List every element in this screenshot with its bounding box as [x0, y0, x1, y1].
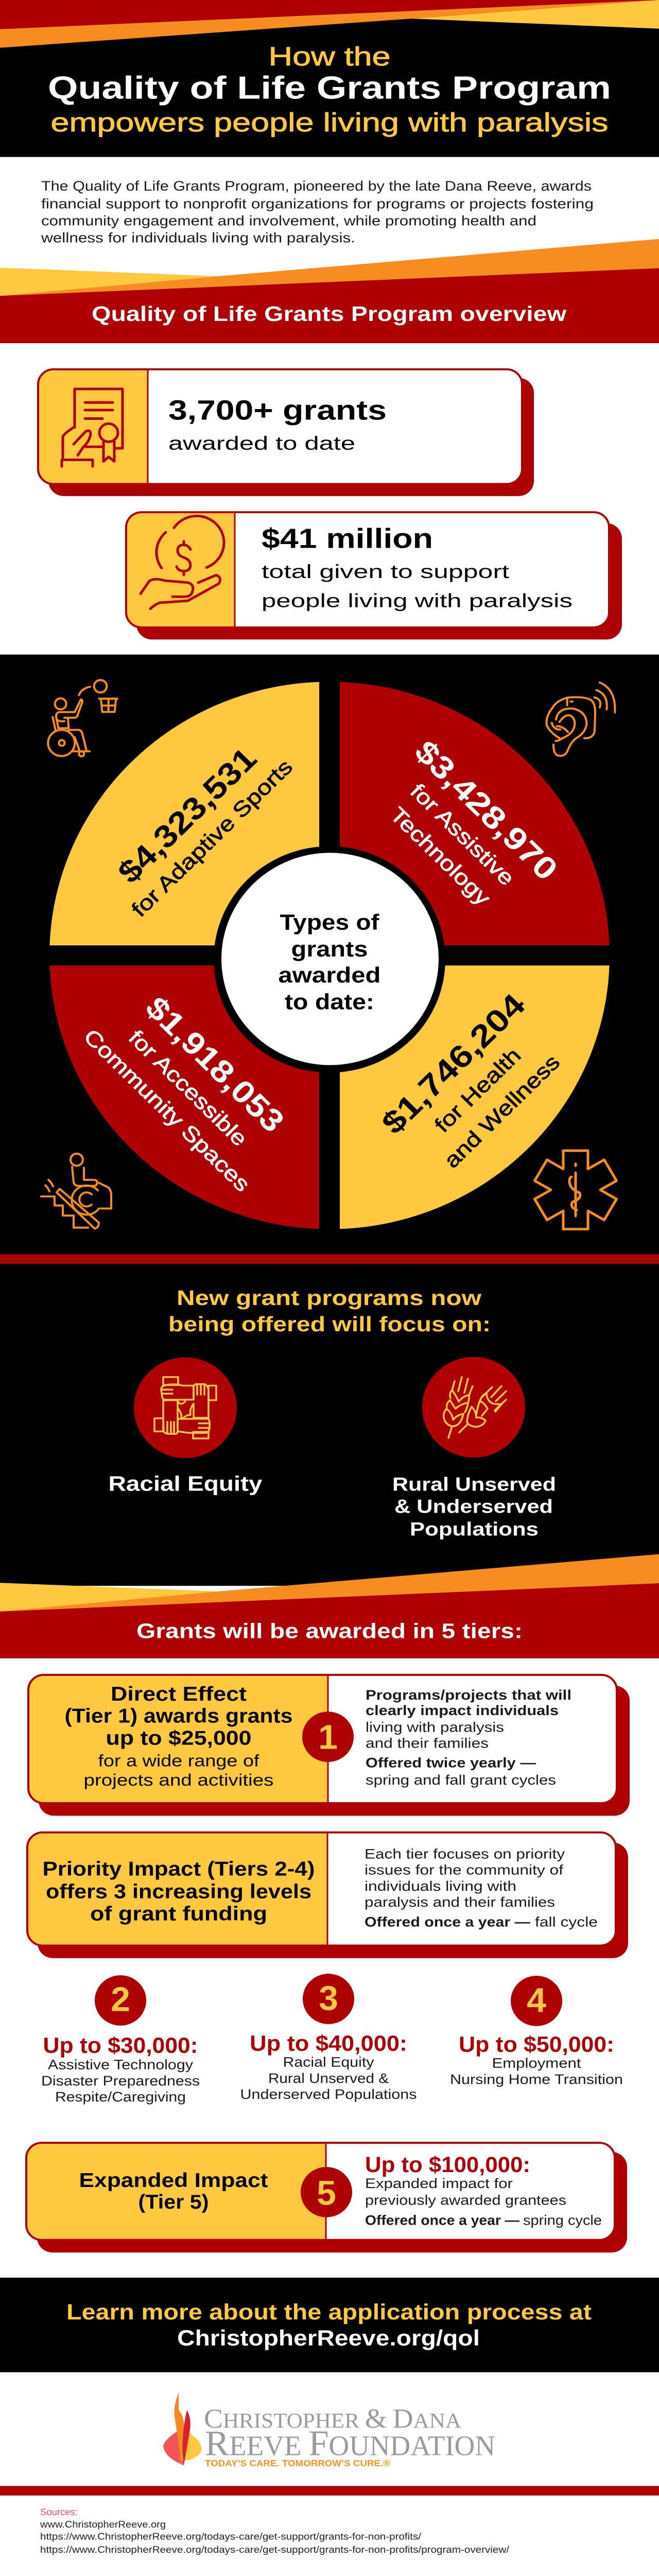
panel: grants stat card [38, 369, 534, 496]
icon: wheelchair basketball [48, 680, 117, 756]
sources [40, 2506, 510, 2555]
label: community spaces amount [79, 990, 291, 1196]
segment: adaptive sports [49, 682, 319, 945]
sources: Sources: [40, 2506, 78, 2517]
panel: header [0, 0, 659, 157]
label: health and wellness amount: and Wellness [439, 1050, 564, 1173]
intro text: community engagement and involvement, while promoting health and [41, 213, 536, 228]
text: priority impact summary: of grant funding [90, 1903, 267, 1925]
text: tier 5 summary: (Tier 5) [138, 2191, 209, 2213]
label: health and wellness amount [375, 987, 564, 1173]
sources: www.ChristopherReeve.org [40, 2519, 166, 2530]
text: tier 1 details: Offered twice yearly — [366, 1755, 536, 1771]
column: tier 3 [240, 1974, 417, 2102]
icon: certificate in hand [62, 389, 123, 466]
label: community spaces amount: Community Spaces [79, 1024, 255, 1196]
sources: https://www.ChristopherReeve.org/todays-care/get-support/grants-for-non-profits/program-overview/ [40, 2544, 510, 2555]
text: tier 5 details: Offered once a year — [365, 2213, 519, 2228]
heading: tiers: Grants will be awarded in 5 tiers: [136, 1619, 523, 1643]
label: rural unserved populations: Populations [410, 1518, 539, 1539]
text: priority impact summary: Priority Impact (Tiers 2-4) [43, 1858, 315, 1880]
icon: flame [163, 2393, 202, 2465]
text: tier 2 details: Respite/Caregiving [55, 2089, 186, 2105]
text: tier 5 summary [79, 2170, 268, 2213]
text: funding stat: $41 million [262, 523, 433, 554]
label: adaptive sports amount [111, 741, 297, 921]
panel: tiers banner [0, 1554, 659, 1658]
text: tier 2 details: Assistive Technology [48, 2057, 194, 2073]
badge: number 3: 3 [319, 1979, 338, 2018]
label: assistive technology amount [386, 734, 565, 910]
panel: tiers 2-4 card [27, 1833, 628, 1958]
text: funding stat: total given to support [262, 561, 510, 582]
badge: number 4: 4 [527, 1981, 546, 2020]
center circle label: to date: [285, 990, 374, 1014]
text: tier 1 summary: (Tier 1) awards grants [64, 1705, 292, 1727]
text: tier 3 details: Up to $40,000: [250, 2031, 407, 2056]
text: tier 1 summary: up to $25,000 [106, 1727, 251, 1750]
panel: new grant programs [0, 1264, 659, 1586]
title: empowers people living with paralysis [50, 107, 609, 137]
segment: accessible community spaces [49, 965, 319, 1229]
text: funding stat [262, 523, 573, 612]
text: grants stat: awarded to date [168, 432, 355, 454]
logo: Christopher and Dana Reeve Foundation: REEVE FOUNDATION [205, 2424, 495, 2463]
text: priority impact details: issues for the community of [365, 1862, 564, 1878]
text: tier 1 details: and their families [366, 1736, 489, 1751]
badge: number 5: 5 [317, 2174, 336, 2212]
text: tier 1 details: clearly impact individuals [366, 1703, 559, 1718]
intro text: The Quality of Life Grants Program, pioneered by the late Dana Reeve, awards [41, 178, 592, 194]
label: adaptive sports amount: $4,323,531 [111, 741, 264, 890]
intro text: financial support to nonprofit organizations for programs or projects fostering [41, 196, 594, 211]
segment: health and wellness [340, 965, 610, 1229]
text: priority impact details: Offered once a year — [365, 1914, 530, 1929]
text: tier 4 details: Up to $50,000: [459, 2032, 614, 2057]
label: health and wellness amount: $1,746,204 [375, 987, 532, 1141]
badge: number 2: 2 [111, 1980, 130, 2019]
text: tier 5 details: Expanded impact for [365, 2176, 513, 2191]
label: adaptive sports amount: for Adaptive Sports [127, 755, 297, 921]
badge: number 1 [302, 1711, 354, 1762]
badge: number 2 [95, 1975, 146, 2026]
badge: number 4 [511, 1976, 562, 2026]
text: funding stat: people living with paralysis [262, 590, 573, 612]
label: community spaces amount: for Accessible [124, 1025, 252, 1151]
panel: overview banner [0, 239, 659, 343]
text: tier 3 details: Racial Equity [283, 2055, 374, 2070]
intro text: wellness for individuals living with paralysis. [41, 230, 355, 246]
text: priority impact details: paralysis and their families [365, 1894, 555, 1910]
title: How the [269, 42, 391, 71]
text: tier 5 details: previously awarded grantees [365, 2193, 566, 2208]
badge: number 5 [301, 2167, 352, 2217]
center circle label: grants [291, 937, 368, 961]
text: tier 3 details: Rural Unserved & [268, 2071, 389, 2086]
text: tier 1 details: Programs/projects that will [366, 1687, 571, 1703]
panel: call to action: ChristopherReeve.org/qol [177, 2326, 480, 2351]
text: grants stat [168, 395, 387, 454]
panel: grant types pie chart [0, 655, 659, 1314]
text: tier 1 summary: for a wide range of [98, 1751, 260, 1770]
text: priority impact summary [43, 1858, 315, 1925]
label: assistive technology amount: $3,428,970 [408, 734, 565, 887]
icon: stair-climbing wheelchair [41, 1154, 111, 1229]
text: tier 1 details: living with paralysis [366, 1720, 504, 1735]
text: tier 1 summary [64, 1683, 292, 1789]
sources: https://www.ChristopherReeve.org/todays-care/get-support/grants-for-non-profits/ [40, 2531, 422, 2542]
text: tier 1 details: spring and fall grant cycles [366, 1772, 556, 1788]
icon: wheat [422, 1357, 525, 1458]
label: racial equity: Racial Equity [109, 1471, 263, 1495]
icon: racial equity hands [134, 1358, 237, 1458]
heading: new grant programs [168, 1286, 491, 1336]
text: tier 4 details: Nursing Home Transition [450, 2072, 623, 2087]
text: priority impact details: individuals living with [365, 1878, 516, 1894]
center circle label: awarded [279, 963, 381, 988]
text: tier 5 details: spring cycle [523, 2213, 602, 2228]
text: tier 3 details [240, 2031, 417, 2102]
icon: coin over hand [141, 516, 224, 609]
segment: assistive technology [340, 682, 610, 945]
text: tier 5 details: Up to $100,000: [365, 2153, 530, 2177]
label: assistive technology amount: for Assistive [406, 779, 519, 890]
title: Quality of Life Grants Program [48, 70, 611, 106]
intro text [41, 178, 594, 246]
label: rural unserved populations [392, 1473, 556, 1539]
center circle label: Types of [280, 910, 379, 935]
title [48, 42, 611, 137]
logo: Christopher and Dana Reeve Foundation: CHRISTOPHER & DANA [204, 2403, 461, 2434]
text: tier 2 details: Disaster Preparedness [41, 2073, 200, 2089]
logo: Christopher and Dana Reeve Foundation [163, 2393, 495, 2468]
text: tier 2 details [41, 2033, 200, 2105]
label: assistive technology amount: Technology [386, 802, 496, 910]
icon: ear with hearing aid [546, 683, 615, 756]
panel: call to action: Learn more about the application process at [66, 2300, 592, 2325]
panel: tier 1 card [28, 1675, 630, 1816]
text: priority impact summary: offers 3 increasing levels [46, 1880, 311, 1903]
text: tier 5 summary: Expanded Impact [79, 2170, 268, 2192]
label: health and wellness amount: for Health [429, 1043, 526, 1137]
text: tier 1 details [366, 1687, 571, 1788]
text: tier 1 summary: Direct Effect [111, 1683, 247, 1705]
heading: overview: Quality of Life Grants Program overview [92, 302, 567, 326]
panel: total funding stat card [126, 512, 622, 639]
label: rural unserved populations: & Underserved [394, 1496, 553, 1517]
label: rural unserved populations: Rural Unserved [392, 1473, 556, 1495]
badge: number 1: 1 [318, 1718, 338, 1756]
text: tier 5 details [365, 2153, 602, 2228]
center circle label [221, 853, 439, 1065]
text: tier 2 details: Up to $30,000: [43, 2033, 198, 2058]
panel: tier 5 card [26, 2143, 627, 2252]
text: priority impact details: Each tier focuses on priority [365, 1846, 565, 1861]
heading: new grant programs: being offered will focus on: [168, 1312, 491, 1336]
icon: star of life [534, 1150, 617, 1229]
column: tier 2 [41, 1975, 200, 2105]
text: priority impact details: fall cycle [535, 1914, 598, 1929]
text: priority impact details [365, 1846, 598, 1929]
column: tier 4 [450, 1976, 623, 2087]
panel: call to action [0, 2278, 659, 2372]
badge: number 3 [303, 1974, 354, 2024]
logo: Christopher and Dana Reeve Foundation: TODAY’S CARE. TOMORROW’S CURE.® [205, 2458, 390, 2468]
text: tier 4 details: Employment [492, 2056, 581, 2071]
text: grants stat: 3,700+ grants [168, 395, 387, 426]
text: tier 4 details [450, 2032, 623, 2087]
label: community spaces amount: $1,918,053 [138, 990, 291, 1139]
heading: new grant programs: New grant programs now [177, 1286, 482, 1310]
text: tier 3 details: Underserved Populations [240, 2087, 417, 2102]
text: tier 1 summary: projects and activities [83, 1770, 274, 1789]
